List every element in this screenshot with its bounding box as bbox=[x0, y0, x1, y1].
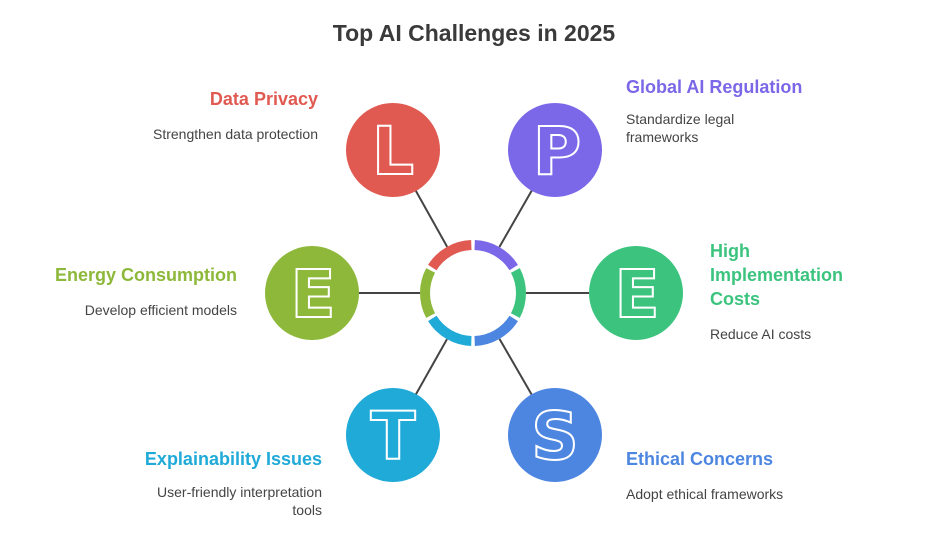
text: Ethical Concerns: Adopt ethical frameworks bbox=[626, 486, 783, 502]
circle: T bbox=[346, 388, 440, 482]
text: Energy Consumption: Develop efficient models bbox=[85, 302, 237, 318]
text: Ethical Concerns: Ethical Concerns bbox=[626, 449, 773, 469]
circle: E left bbox=[265, 246, 359, 340]
circle: P: P bbox=[533, 113, 581, 190]
circle: P bbox=[508, 103, 602, 197]
circle: E right bbox=[589, 246, 683, 340]
text: Global AI Regulation: frameworks bbox=[626, 129, 698, 145]
text: High Implementation Costs bbox=[710, 241, 843, 342]
text: High Implementation Costs: High bbox=[710, 241, 750, 261]
center ring bbox=[420, 240, 526, 346]
text: Ethical Concerns bbox=[626, 449, 783, 502]
text: Explainability Issues: tools bbox=[292, 502, 322, 518]
circle: E right: E bbox=[614, 256, 660, 333]
text: High Implementation Costs: Reduce AI costs bbox=[710, 326, 811, 342]
text: High Implementation Costs: Costs bbox=[710, 289, 760, 309]
connector lines bbox=[312, 150, 636, 435]
circle: S: S bbox=[531, 398, 579, 475]
circle: T: T bbox=[370, 398, 416, 475]
text: Data Privacy bbox=[153, 89, 318, 142]
text: Global AI Regulation bbox=[626, 77, 802, 145]
text: Energy Consumption bbox=[55, 265, 237, 318]
circle: S bbox=[508, 388, 602, 482]
circle: L: L bbox=[372, 113, 414, 190]
text: Data Privacy: Data Privacy bbox=[210, 89, 318, 109]
text: Explainability Issues bbox=[145, 449, 322, 518]
circle: L bbox=[346, 103, 440, 197]
text: Energy Consumption: Energy Consumption bbox=[55, 265, 237, 285]
text: Data Privacy: Strengthen data protection bbox=[153, 126, 318, 142]
text: High Implementation Costs: Implementation bbox=[710, 265, 843, 285]
text: Global AI Regulation: Global AI Regulation bbox=[626, 77, 802, 97]
circle: E left: E bbox=[290, 256, 336, 333]
text: Explainability Issues: User-friendly interpretation bbox=[157, 484, 322, 500]
text: Explainability Issues: Explainability Issues bbox=[145, 449, 322, 469]
text: Global AI Regulation: Standardize legal bbox=[626, 111, 734, 127]
title: Top AI Challenges in 2025 bbox=[333, 20, 615, 46]
